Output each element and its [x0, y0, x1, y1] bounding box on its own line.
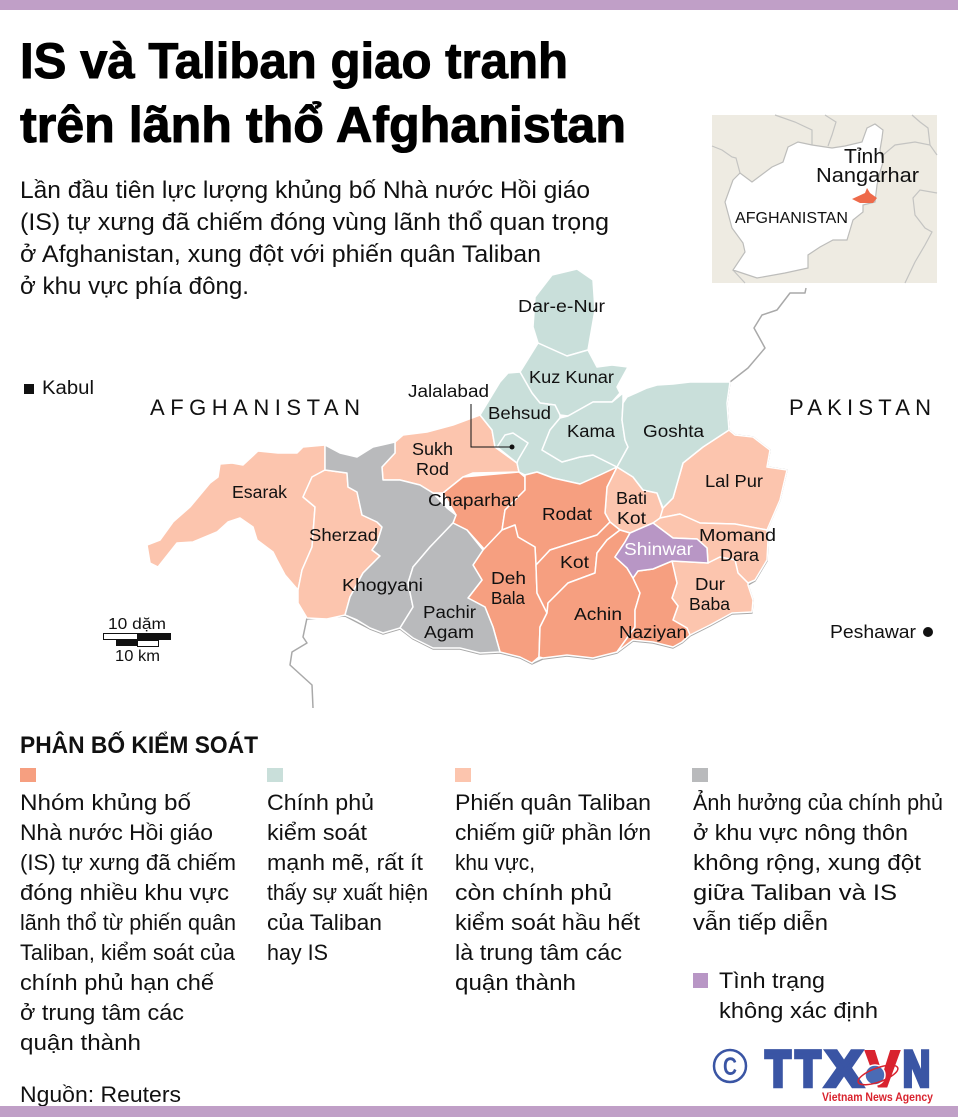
- district Achin: [539, 530, 640, 658]
- district labels: Kama: [567, 421, 615, 441]
- district: undetermined Shinwar: [615, 523, 708, 578]
- legend: Taliban-held: còn chính phủ: [455, 880, 612, 905]
- legend: IS-held: đóng nhiều khu vực: [20, 880, 229, 905]
- district Naziyan: [617, 561, 690, 652]
- legend: Taliban-held: Phiến quân Taliban: [455, 790, 651, 815]
- inset: province label: Nangarhar: [816, 165, 919, 187]
- inset: province label: [816, 146, 919, 187]
- district labels: Behsud: [488, 403, 551, 423]
- district labels: Kuz Kunar: [529, 367, 614, 387]
- district Chaparhar: [443, 472, 525, 550]
- inset: Afghanistan shape: [725, 124, 883, 278]
- legend: IS-held: chính phủ hạn chế: [20, 970, 215, 995]
- TTXVN logo: V: [866, 1041, 900, 1097]
- district Khogyani: [325, 442, 456, 633]
- title: [20, 33, 626, 153]
- legend: government-controlled: hay IS: [267, 940, 328, 965]
- legend: government-controlled: của Taliban: [267, 910, 382, 935]
- district labels: Kot: [617, 508, 646, 528]
- district labels: Momand: [699, 525, 776, 545]
- district Kuz Kunar: [520, 343, 628, 416]
- district labels: Naziyan: [619, 622, 687, 642]
- title: trên lãnh thổ Afghanistan: [20, 97, 626, 153]
- district Kama: [542, 393, 628, 467]
- district labels: Bala: [491, 588, 525, 608]
- legend: Taliban-held: chiếm giữ phần lớn: [455, 820, 651, 845]
- map of Nangarhar districts: [147, 269, 806, 708]
- top band: [0, 0, 958, 10]
- bottom band: [0, 1106, 958, 1117]
- TTXVN logo: N: [903, 1041, 930, 1097]
- district labels: Dar-e-Nur: [518, 296, 605, 316]
- legend: IS-held: Nhóm khủng bố: [20, 790, 192, 815]
- district Sherzad: [298, 470, 382, 619]
- legend: government-controlled: [267, 768, 428, 965]
- legend: undetermined: Tình trạng: [719, 968, 825, 993]
- district labels: Goshta: [643, 421, 704, 441]
- district labels: Dur: [695, 574, 725, 594]
- district Kot: [536, 522, 620, 613]
- TTXVN logo: [766, 1041, 934, 1104]
- district Lal Pur: [660, 430, 787, 530]
- city marker Kabul: Kabul: [42, 378, 94, 399]
- district labels: Rodat: [542, 504, 592, 524]
- legend: Taliban-held: kiểm soát hầu hết: [455, 910, 641, 935]
- legend: contested: Ảnh hưởng của chính phủ: [693, 790, 943, 815]
- districts: Taliban-held: [147, 415, 787, 635]
- legend: IS-held: ở trung tâm các: [20, 1000, 184, 1025]
- district labels: Khogyani: [342, 575, 423, 595]
- districts: IS-held: [443, 467, 690, 663]
- legend: undetermined: [693, 968, 878, 1023]
- legend: Taliban-held: [455, 768, 651, 995]
- legend: IS-held: quận thành: [20, 1030, 141, 1055]
- title: IS và Taliban giao tranh: [20, 33, 568, 89]
- copyright icon: [714, 1050, 746, 1082]
- city marker Kabul: [24, 378, 94, 399]
- district Behsud: [480, 372, 617, 484]
- scale bar: 10 dặm: [108, 616, 166, 633]
- legend: Taliban-held: là trung tâm các: [455, 940, 622, 965]
- district labels: [232, 296, 776, 642]
- city marker Peshawar: Peshawar: [830, 622, 916, 642]
- district labels: Baba: [689, 594, 730, 614]
- district Momand Dara: [653, 514, 768, 583]
- inset: Nangarhar province: [852, 188, 877, 203]
- district Pachir Agam: [400, 523, 500, 653]
- district labels: Bati: [616, 488, 647, 508]
- districts: contested: [325, 442, 500, 653]
- legend: government-controlled: thấy sự xuất hiện: [267, 880, 428, 905]
- legend: contested: không rộng, xung đột: [693, 850, 922, 875]
- TTXVN logo: X: [826, 1041, 862, 1097]
- legend: IS-held: lãnh thổ từ phiến quân: [20, 910, 236, 935]
- district labels: Lal Pur: [705, 471, 763, 491]
- district Dar-e-Nur: [533, 269, 595, 356]
- legend: IS-held: (IS) tự xưng đã chiếm: [20, 850, 236, 875]
- country label Afghanistan: AFGHANISTAN: [150, 395, 360, 420]
- source note: Nguồn: Reuters: [20, 1082, 181, 1107]
- district labels: Pachir: [423, 602, 476, 622]
- district labels: Shinwar: [624, 539, 693, 559]
- district Deh Bala: [468, 525, 547, 663]
- district labels: Sukh: [412, 439, 453, 459]
- TTXVN logo: T: [766, 1041, 790, 1097]
- inset: province label: Tỉnh: [844, 146, 885, 168]
- district Goshta: [617, 382, 730, 508]
- TTXVN logo: Vietnam News Agency: [822, 1092, 934, 1104]
- intro text: Lần đầu tiên lực lượng khủng bố Nhà nước Hồi giáo: [20, 177, 590, 204]
- legend: IS-held: Nhà nước Hồi giáo: [20, 820, 213, 845]
- legend: contested: giữa Taliban và IS: [693, 880, 897, 905]
- district labels: Jalalabad: [408, 381, 489, 401]
- district labels: Dara: [720, 545, 759, 565]
- district labels: Esarak: [232, 482, 287, 502]
- inset: neighbouring borders: [712, 115, 937, 283]
- district labels: Sherzad: [309, 525, 378, 545]
- district Dur Baba: [672, 557, 753, 635]
- legend: contested: [692, 768, 943, 935]
- intro text: ở Afghanistan, xung đột với phiến quân Taliban: [20, 241, 541, 268]
- intro text: ở khu vực phía đông.: [20, 273, 249, 300]
- district labels: Chaparhar: [428, 490, 518, 510]
- country label Pakistan: PAKISTAN: [789, 395, 931, 420]
- intro text: [20, 177, 609, 300]
- legend heading: PHÂN BỐ KIỂM SOÁT: [20, 731, 258, 759]
- Jalalabad pointer: [471, 404, 514, 450]
- district Rodat: [502, 467, 617, 565]
- scale bar: 10 km: [115, 648, 160, 665]
- international border lines: [290, 288, 806, 708]
- legend: government-controlled: kiểm soát: [267, 820, 368, 845]
- Jalalabad city boundary: [497, 433, 528, 463]
- legend: IS-held: [20, 768, 236, 1055]
- legend: government-controlled: Chính phủ: [267, 790, 374, 815]
- legend: government-controlled: mạnh mẽ, rất ít: [267, 850, 424, 875]
- district Esarak: [147, 445, 325, 590]
- TTXVN logo: T: [796, 1041, 820, 1097]
- legend: Taliban-held: khu vực,: [455, 850, 535, 875]
- district Bati Kot: [605, 467, 663, 533]
- legend: undetermined: không xác định: [719, 998, 878, 1023]
- inset locator map: [712, 115, 937, 283]
- legend: IS-held: Taliban, kiểm soát của: [20, 940, 235, 965]
- district Sukh Rod: [382, 415, 519, 493]
- intro text: (IS) tự xưng đã chiếm đóng vùng lãnh thổ quan trọng: [20, 209, 609, 236]
- districts: government-controlled: [480, 269, 730, 508]
- district labels: Agam: [424, 622, 474, 642]
- district labels: Deh: [491, 568, 526, 588]
- legend: contested: ở khu vực nông thôn: [693, 820, 908, 845]
- scale bar: [104, 616, 171, 665]
- district labels: Achin: [574, 604, 622, 624]
- copyright icon: C: [723, 1053, 737, 1081]
- inset: country label: AFGHANISTAN: [735, 210, 848, 227]
- legend: contested: vẫn tiếp diễn: [693, 910, 828, 935]
- district labels: Kot: [560, 552, 589, 572]
- legend: Taliban-held: quận thành: [455, 970, 576, 995]
- district labels: Rod: [416, 459, 449, 479]
